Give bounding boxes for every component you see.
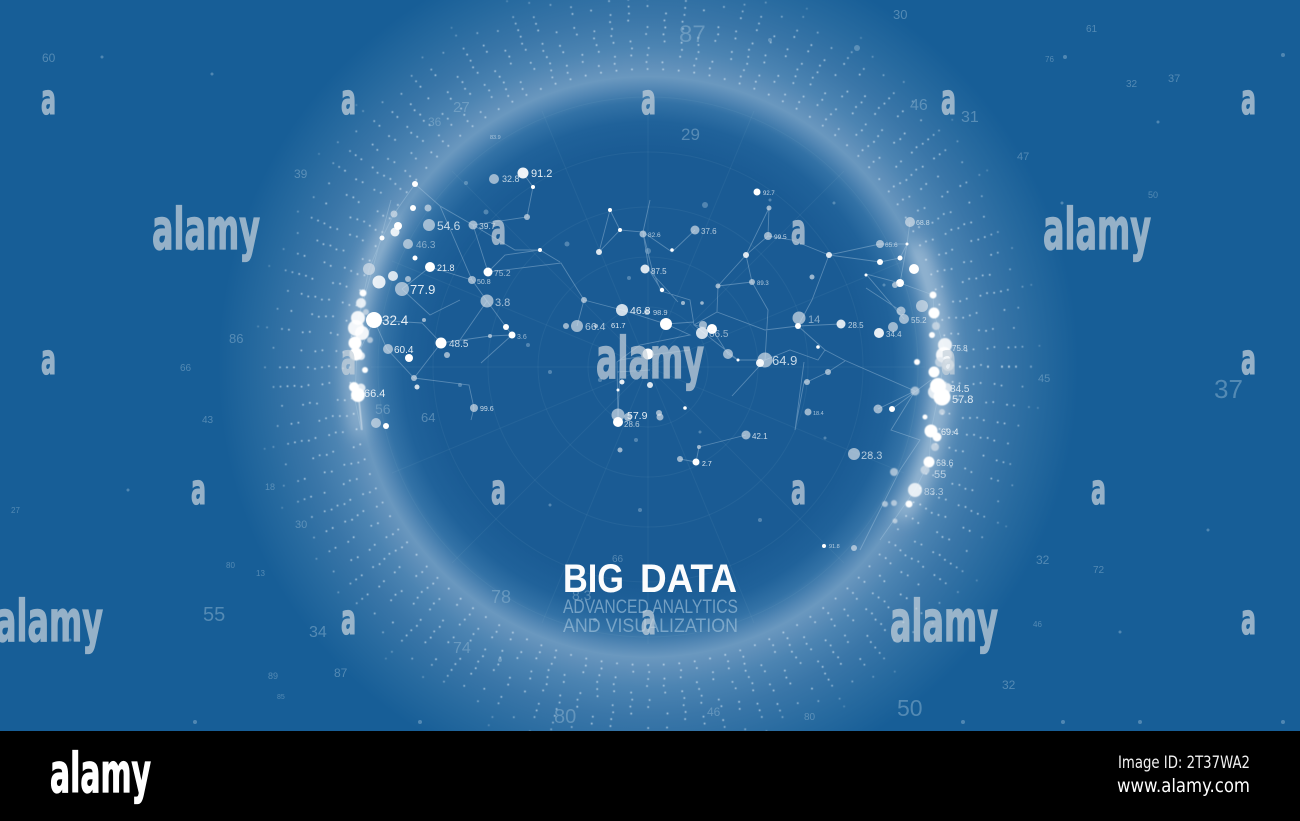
faint background numbers: 27: [453, 99, 470, 116]
title: big data: BIG: [563, 557, 624, 601]
node value labels: 32.8: [502, 174, 520, 184]
faint background numbers: 89: [268, 671, 278, 681]
faint background numbers: 64: [421, 410, 435, 425]
alamy watermarks: a: [1241, 335, 1256, 384]
node value labels: 91.8: [829, 544, 840, 550]
alamy watermarks: a: [341, 595, 356, 644]
scattered background dots: [68, 38, 1285, 724]
alamy watermarks: a: [1241, 595, 1256, 644]
faint background numbers: 31: [961, 109, 979, 126]
alamy watermarks: alamy: [1043, 197, 1151, 263]
alamy watermarks: alamy: [152, 197, 260, 263]
alamy watermarks: a: [491, 465, 506, 514]
network connections: [355, 173, 945, 550]
network nodes: [363, 168, 928, 551]
node value labels: 34.4: [886, 330, 902, 339]
bright rim crescents: [352, 222, 942, 512]
faint background numbers: 76: [1045, 55, 1054, 64]
faint background numbers: 87: [679, 21, 706, 48]
faint background numbers: 78: [491, 587, 511, 607]
alamy watermarks: a: [491, 205, 506, 254]
node value labels: 77.9: [410, 282, 435, 297]
node value labels: 46.8: [630, 305, 651, 317]
faint background numbers: 8.3: [572, 587, 592, 603]
node value labels: 14: [808, 314, 820, 326]
faint background numbers: 80: [804, 712, 816, 723]
node value labels: 32.4: [382, 313, 409, 328]
faint background numbers: 46: [707, 705, 721, 719]
alamy watermarks: a: [41, 335, 56, 384]
faint background numbers: 29: [681, 125, 700, 144]
node value labels: 42.1: [752, 432, 768, 441]
faint background numbers: 50: [1148, 190, 1158, 200]
radial dotted spokes: [256, 0, 1040, 759]
faint background numbers: 74: [453, 640, 471, 657]
faint background numbers: 36: [428, 115, 442, 129]
footer logo: alamy: [50, 742, 151, 805]
faint background numbers: 72: [1093, 565, 1105, 576]
node value labels: 65.6: [885, 242, 898, 249]
glowing sphere ring: [218, 0, 1078, 797]
node value labels: 68.6: [936, 458, 954, 468]
node value labels: 28.5: [848, 321, 864, 330]
faint background numbers: 80: [554, 706, 576, 728]
footer bar: [0, 731, 1300, 821]
subtitle: [563, 597, 738, 637]
node value labels: 68.8: [916, 220, 930, 227]
node value labels: 92.7: [763, 191, 775, 197]
faint background numbers: 13: [256, 569, 265, 578]
faint background numbers: 50: [897, 695, 923, 721]
node value labels: 3.6: [517, 334, 527, 341]
faint background numbers: 45: [1038, 373, 1050, 385]
alamy watermarks: a: [641, 75, 656, 124]
alamy watermarks: a: [191, 465, 206, 514]
subtitle: AND VISUALIZATION: [563, 616, 738, 637]
node value labels: 64.9: [772, 353, 797, 368]
node value labels: 28.6: [624, 420, 640, 429]
faint background numbers: 18: [265, 482, 275, 492]
faint background numbers: 30: [295, 519, 307, 531]
node value labels: 87.5: [651, 267, 667, 276]
node value labels: 84.5: [950, 384, 970, 395]
node value labels: 50.8: [477, 279, 491, 286]
alamy watermarks: a: [341, 335, 356, 384]
faint background numbers: 39: [294, 167, 308, 181]
faint background numbers: 80: [226, 561, 235, 570]
node value labels: 18.4: [813, 411, 824, 417]
node value labels: 46.3: [416, 240, 436, 251]
node value labels: 48.5: [449, 339, 469, 350]
node value labels: 37.6: [701, 227, 717, 236]
faint background numbers: 32: [1126, 79, 1138, 90]
faint background numbers: 47: [1017, 151, 1029, 163]
faint background numbers: 46: [1033, 620, 1042, 629]
node value labels: 21.8: [437, 263, 455, 273]
node value labels: 57.9: [627, 410, 648, 422]
node value labels: 55.2: [911, 316, 927, 325]
faint background numbers: 66: [180, 363, 192, 374]
node value labels: [364, 135, 973, 550]
faint background numbers: 60: [42, 51, 56, 65]
node value labels: 91.2: [531, 168, 552, 180]
node value labels: 66.5: [709, 329, 729, 340]
faint background numbers: 86: [229, 331, 243, 346]
website: www.alamy.com: [1117, 775, 1250, 797]
faint background numbers: 43: [202, 415, 214, 426]
faint background numbers: 27: [11, 506, 20, 515]
faint background numbers: 46: [910, 97, 928, 114]
node value labels: 75.2: [494, 268, 511, 278]
faint background numbers: 87: [334, 666, 348, 680]
alamy watermarks: a: [341, 75, 356, 124]
alamy watermarks: a: [41, 75, 56, 124]
alamy watermarks: alamy: [0, 589, 103, 655]
node value labels: 57.8: [952, 394, 973, 406]
image id: Image ID: 2T37WA2: [1118, 753, 1250, 773]
alamy watermarks: a: [1241, 75, 1256, 124]
faint background numbers: 66: [612, 554, 624, 565]
node value labels: 83.9: [490, 135, 501, 141]
alamy watermarks: a: [641, 595, 656, 644]
alamy watermarks: alamy: [890, 589, 998, 655]
faint background numbers: 32: [1002, 678, 1016, 692]
node value labels: 69.4: [941, 427, 959, 437]
node value labels: 39.7: [479, 221, 496, 231]
title: big data: [563, 557, 738, 637]
node value labels: 99.6: [480, 406, 494, 413]
faint background numbers: 61: [1086, 24, 1098, 35]
node value labels: 98.9: [653, 308, 668, 317]
node value labels: 99.5: [774, 234, 787, 241]
node value labels: 89.3: [757, 281, 769, 287]
faint background numbers: 37: [1214, 374, 1243, 404]
alamy watermarks: a: [1091, 465, 1106, 514]
alamy watermarks: alamy: [596, 326, 704, 392]
node value labels: 28.3: [861, 450, 882, 462]
node value labels: 60.4: [394, 345, 414, 356]
faint background numbers: 37: [1168, 73, 1180, 85]
node value labels: 61.7: [611, 321, 626, 330]
node value labels: 66.4: [364, 388, 385, 400]
left rim node cluster: [348, 290, 373, 430]
node value labels: 3.8: [495, 297, 510, 309]
alamy watermarks: a: [941, 335, 956, 384]
node value labels: 75.8: [952, 344, 968, 353]
node value labels: 82.6: [648, 232, 661, 239]
faint background numbers: 34: [309, 624, 327, 641]
node value labels: 55: [934, 469, 946, 481]
alamy watermarks: a: [941, 75, 956, 124]
alamy watermarks: [0, 75, 1256, 655]
node value labels: 54.6: [437, 219, 461, 233]
faint background numbers: 55: [203, 604, 225, 626]
alamy watermarks: a: [791, 205, 806, 254]
faint background numbers: 30: [893, 7, 907, 22]
node value labels: 66.4: [585, 321, 606, 333]
node value labels: 83.3: [924, 487, 944, 498]
faint background numbers: 32: [1036, 553, 1050, 567]
polar grid: [371, 90, 925, 644]
right rim node cluster: [882, 292, 954, 524]
node value labels: 2.7: [702, 461, 712, 468]
faint background numbers: 85: [277, 694, 285, 701]
alamy watermarks: a: [791, 465, 806, 514]
title: big data: DATA: [640, 557, 737, 601]
faint background numbers: 56: [375, 401, 391, 417]
subtitle: ADVANCED ANALYTICS: [563, 597, 738, 618]
